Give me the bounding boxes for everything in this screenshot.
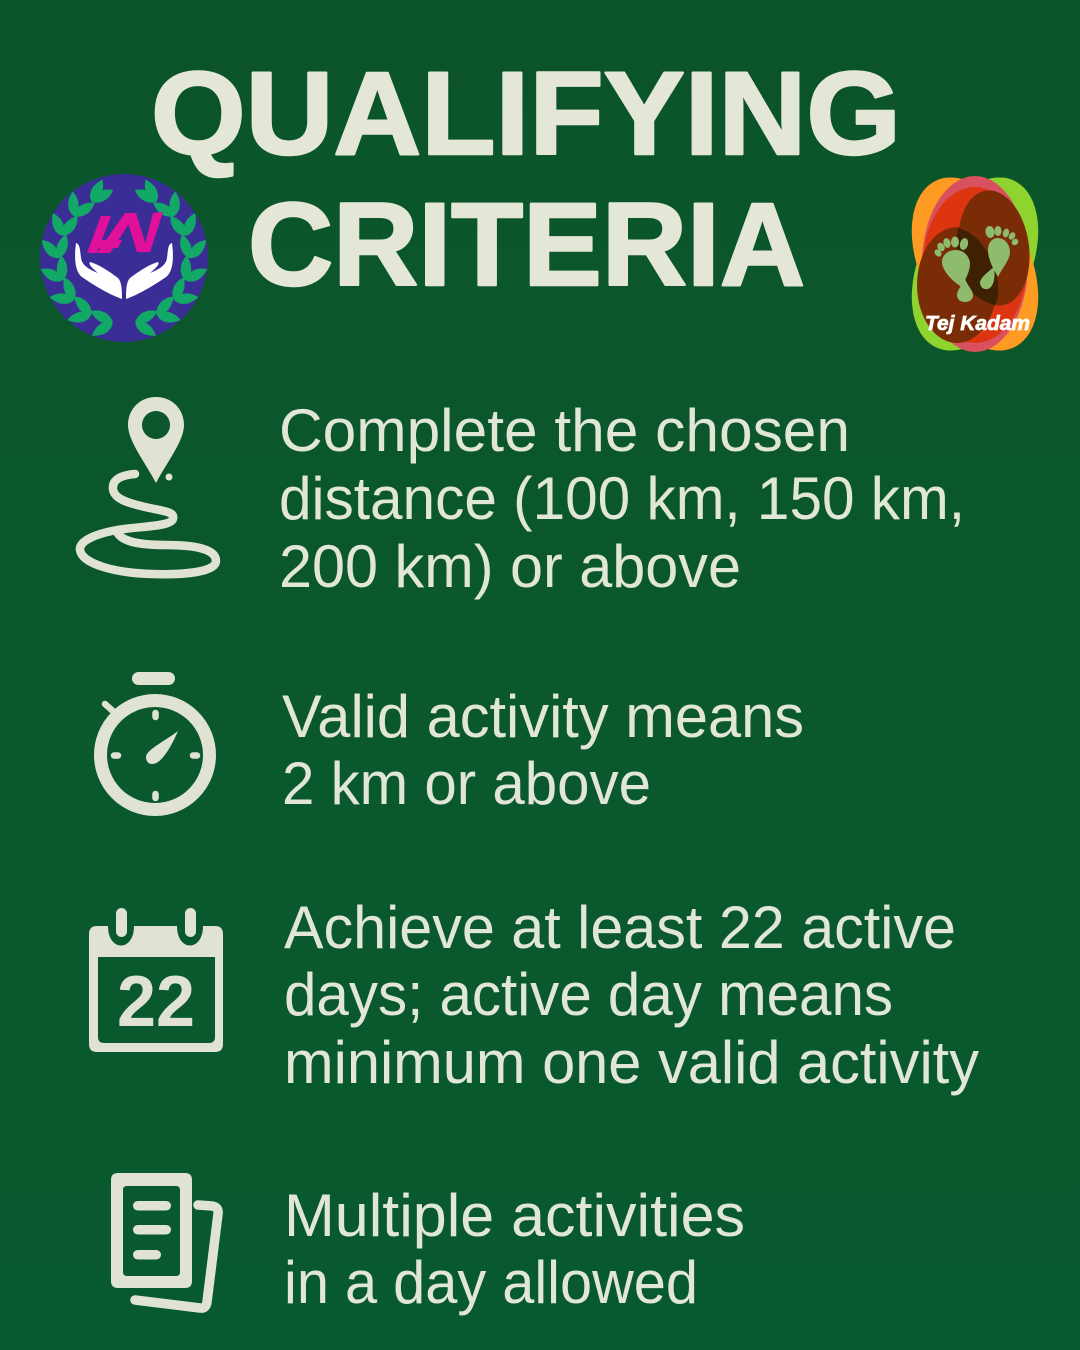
icon: stopwatch bbox=[100, 672, 210, 810]
text: active days: days; active day means bbox=[284, 961, 893, 1028]
text: multiple activities: in a day allowed bbox=[284, 1249, 698, 1316]
brown overlaps bbox=[917, 227, 997, 343]
HAV monogram bbox=[87, 212, 163, 253]
icon: calendar 22 bbox=[89, 908, 223, 1052]
logo: HAV bbox=[39, 174, 209, 342]
text: active days: minimum one valid activity bbox=[284, 1029, 979, 1096]
brand name: Tej Kadam bbox=[925, 313, 1030, 335]
text: distance: Complete the chosen bbox=[279, 397, 850, 464]
title: CRITERIA bbox=[248, 179, 805, 311]
icon: map pin with winding route bbox=[80, 397, 216, 574]
text: valid activity: 2 km or above bbox=[282, 750, 651, 817]
title: QUALIFYING bbox=[151, 48, 901, 180]
logo: Tej Kadam bbox=[886, 157, 1064, 371]
text: distance bbox=[279, 397, 965, 600]
hands bbox=[75, 243, 122, 299]
icon: calendar 22: 22 bbox=[117, 962, 195, 1042]
wreath leaves bbox=[39, 178, 209, 338]
text: multiple activities: Multiple activities bbox=[284, 1182, 745, 1249]
footprints bbox=[933, 225, 1020, 302]
text: multiple activities bbox=[284, 1182, 745, 1316]
text: distance: 200 km) or above bbox=[279, 533, 741, 600]
text: distance: distance (100 km, 150 km, bbox=[279, 465, 965, 532]
text: active days bbox=[284, 894, 979, 1096]
icon: documents bbox=[111, 1173, 218, 1308]
text: valid activity: Valid activity means bbox=[282, 683, 804, 750]
text: valid activity bbox=[282, 683, 804, 817]
text: active days: Achieve at least 22 active bbox=[284, 894, 956, 961]
title bbox=[151, 48, 901, 311]
